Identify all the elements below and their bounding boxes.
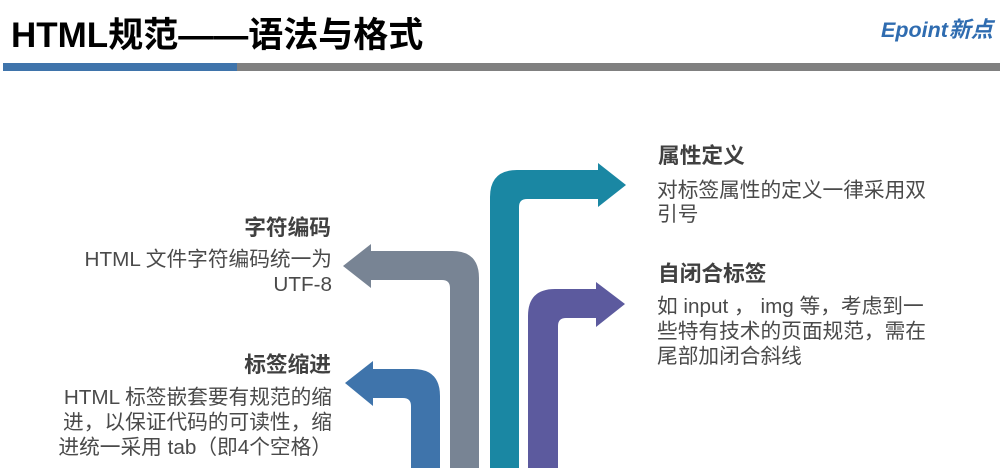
- arrow: teal, attribute definition: [490, 163, 626, 468]
- block: character encoding: [85, 215, 332, 296]
- text: attribute definition: 对标签属性的定义一律采用双: [657, 179, 926, 202]
- text: character encoding: [85, 248, 332, 296]
- text: self-closing tags: 些特有技术的页面规范，需在: [657, 320, 926, 343]
- text: tag indentation: HTML 标签嵌套要有规范的缩: [64, 386, 332, 409]
- heading: attribute definition: 属性定义: [658, 143, 745, 168]
- title: HTML规范——语法与格式: [11, 16, 423, 55]
- heading: character encoding: 字符编码: [244, 215, 331, 240]
- text: character encoding: UTF-8: [273, 273, 332, 296]
- text: self-closing tags: [657, 295, 926, 368]
- arrow: gray, character encoding: [343, 244, 479, 468]
- text: character encoding: HTML 文件字符编码统一为: [85, 248, 332, 271]
- text: self-closing tags: 如 input ， img 等，考虑到一: [657, 295, 924, 318]
- block: self-closing tags: [657, 261, 926, 368]
- text: attribute definition: 引号: [657, 203, 698, 226]
- header rule: gray segment: [237, 63, 1000, 71]
- block: tag indentation: [58, 352, 332, 459]
- text: tag indentation: [58, 386, 332, 459]
- heading: self-closing tags: 自闭合标签: [658, 261, 766, 286]
- arrow: blue, tag indentation: [345, 361, 440, 468]
- arrow: purple, self-closing tags: [528, 282, 625, 468]
- heading: tag indentation: 标签缩进: [244, 352, 331, 377]
- text: attribute definition: [657, 179, 926, 226]
- text: tag indentation: 进，以保证代码的可读性，缩: [63, 411, 332, 434]
- block: attribute definition: [657, 143, 926, 226]
- text: tag indentation: 进统一采用 tab（即4个空格）: [58, 436, 332, 459]
- header rule: blue segment: [3, 63, 237, 71]
- logo: Epoint 新点: Epoint新点: [881, 17, 993, 42]
- text: self-closing tags: 尾部加闭合斜线: [657, 345, 802, 368]
